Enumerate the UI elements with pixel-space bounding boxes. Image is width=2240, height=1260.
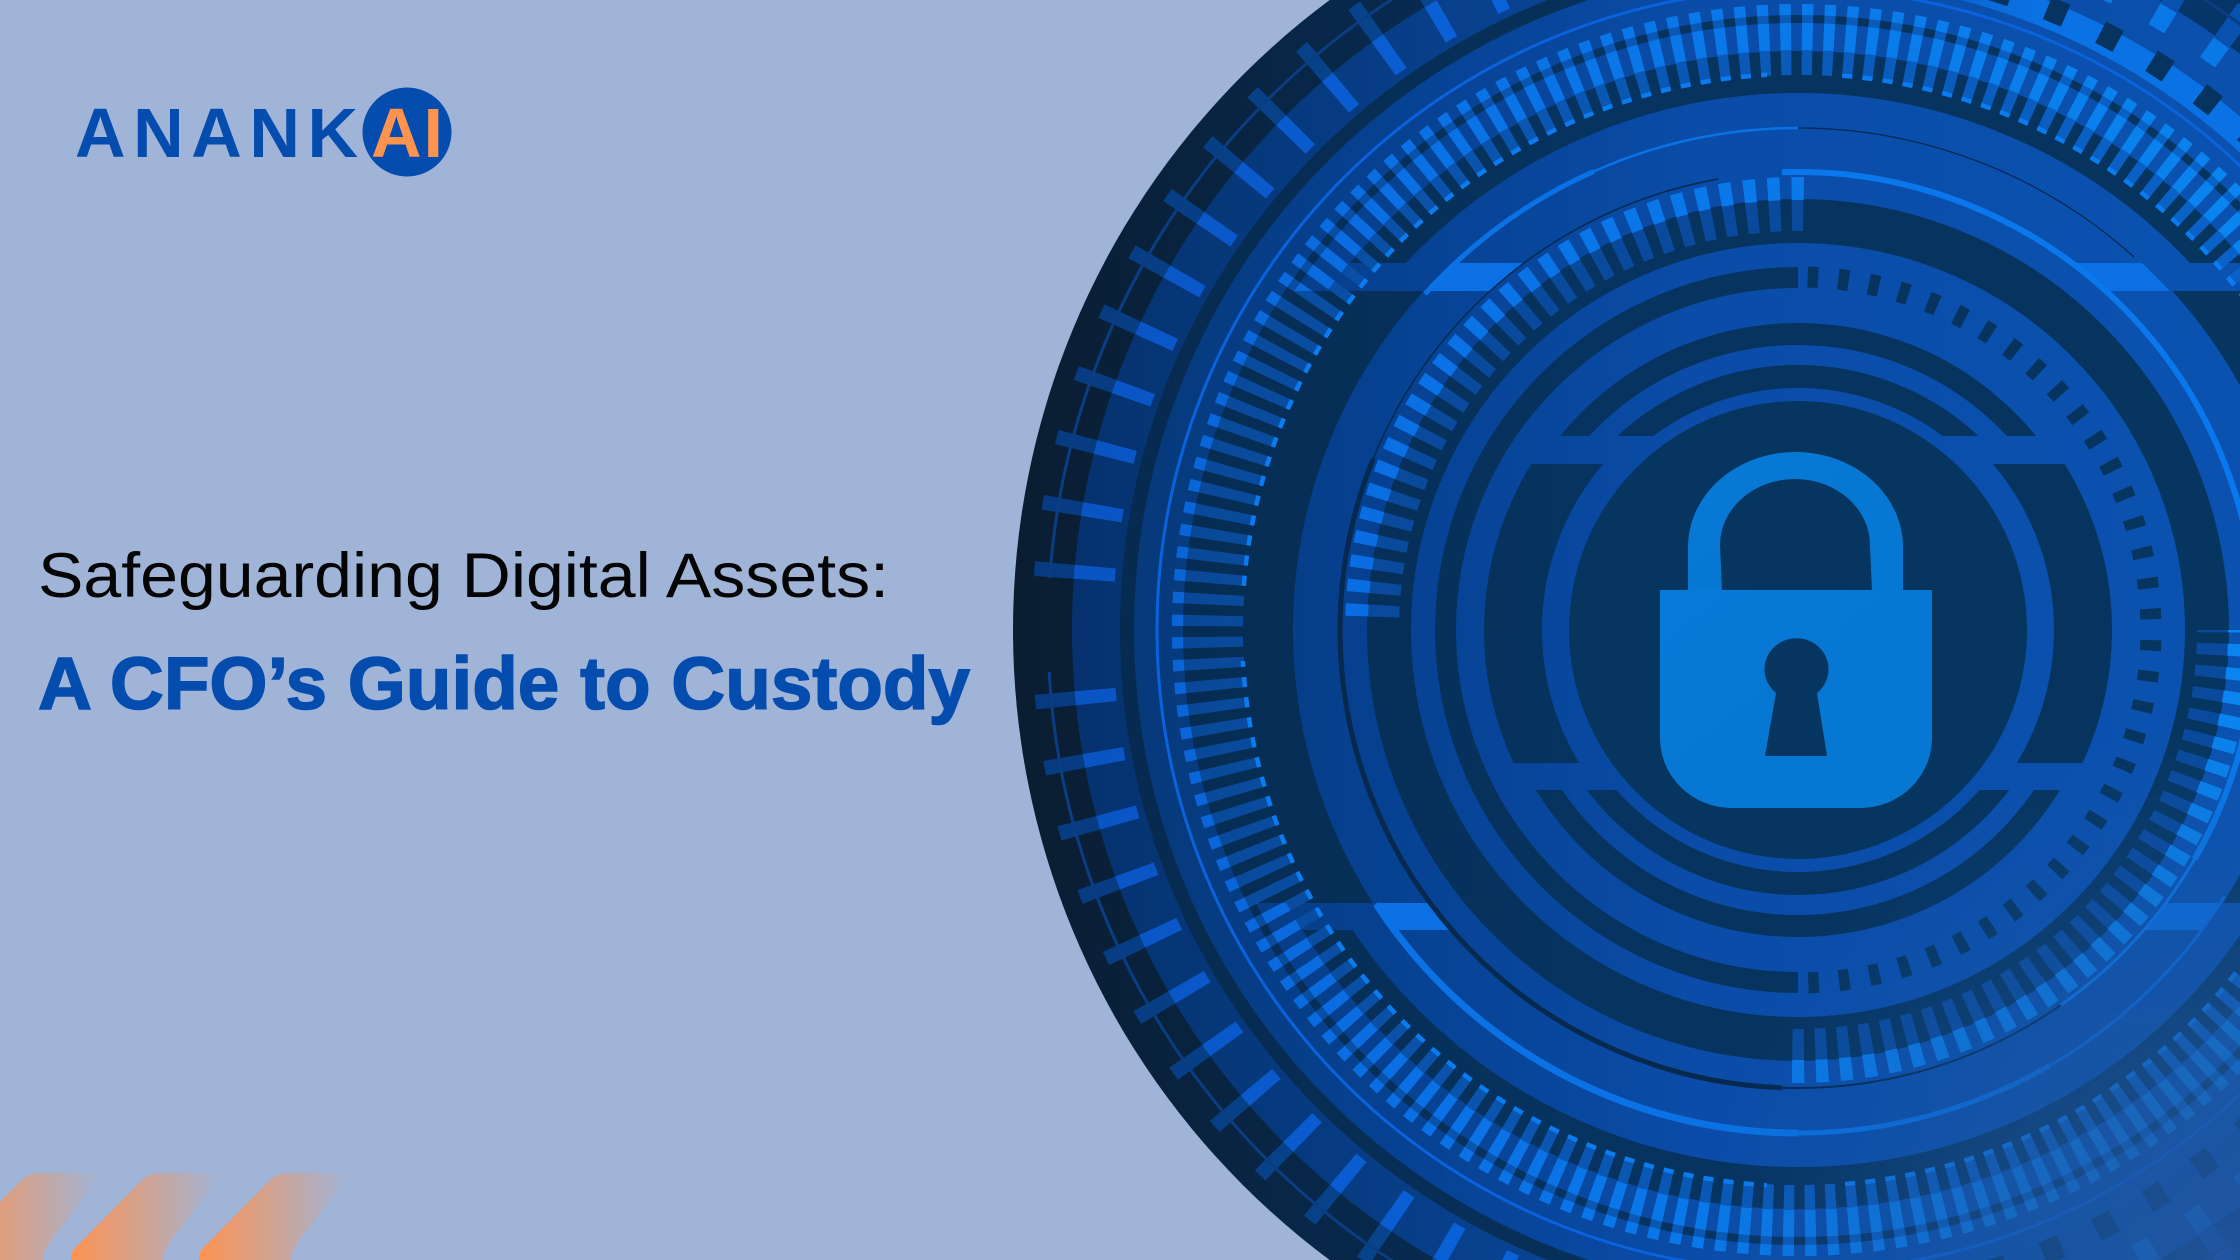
long radial bars, outer dim part [1034, 0, 1437, 1260]
bright top-right arc [1961, 0, 2240, 152]
outer dark disk [1013, 0, 2240, 1260]
line r458 lower right thin [2060, 858, 2196, 1006]
lighter corner glow [1013, 0, 2240, 1260]
lower right tick arc dim [1792, 630, 2228, 1060]
long radial bars, inner bright part [1074, 0, 1519, 1260]
upper left tick arc dim [1368, 200, 1804, 618]
line r458 upper left thin dark [1372, 178, 1718, 459]
tick ring bars [1208, 40, 2240, 1220]
security dial with concentric rings [1013, 0, 2240, 1260]
keyhole [1764, 638, 1828, 756]
chevron 2 [71, 1173, 222, 1260]
dark squares on bright arc [1988, 0, 2240, 1260]
tick ring inner bright dashes [1242, 74, 2240, 1186]
thin outer line [1048, 0, 2240, 1260]
solid left half ring [1435, 267, 1798, 993]
tick ring bright cap segments [1204, 36, 2240, 1224]
lower right tick arc bright [1792, 630, 2240, 1083]
line r503 lower left bright [1373, 902, 1798, 1136]
inner arcs outer [1502, 334, 2094, 926]
bright connector bands [1376, 263, 2218, 930]
side dark band [1183, 291, 2240, 903]
tick ring bright tips [1178, 10, 2240, 1250]
dark ring r671 [1120, 0, 1588, 1260]
upper left tick arc bright [1345, 177, 1804, 616]
padlock body [1660, 590, 1932, 808]
decorative chevrons [0, 1173, 350, 1260]
line r458 lower right bright [2192, 738, 2240, 860]
dark crossing ring [1187, 19, 2240, 1241]
logo wordmark: ANANK [75, 94, 358, 172]
dark ring r387-432 [1389, 221, 2207, 1039]
title block [38, 541, 970, 725]
title line 2: A CFO’s Guide to Custody [38, 642, 970, 725]
inner arcs inner [1544, 376, 2052, 884]
central dark disk [1569, 401, 2027, 859]
line r458 upper right bright [1782, 169, 2240, 522]
title line 1: Safeguarding Digital Assets: [38, 541, 889, 611]
right long bars, bright part [2104, 0, 2240, 1260]
top and bottom dark band behind ticks [1240, 72, 2240, 1188]
dashed right half ring [1807, 266, 2162, 994]
right long bars, dim part [2160, 0, 2240, 1260]
padlock shackle [1688, 452, 1903, 592]
logo AI letters: AI [371, 94, 443, 172]
chevron 3 [199, 1173, 350, 1260]
line r503 upper right dark [1798, 127, 2134, 258]
line r503 lower right thin [2049, 896, 2226, 1066]
bright thin line r641 [1157, 0, 2240, 1260]
brand logo [75, 88, 452, 176]
inner side dark blocks [1513, 345, 2083, 915]
logo circle [362, 88, 452, 176]
line r503 upper left bright [1423, 169, 1595, 296]
outer medium ring [1072, 0, 2240, 1260]
padlock icon [1660, 452, 1932, 808]
inner blue disk [1166, 0, 1647, 1260]
line r458 left dark [1338, 458, 1782, 1090]
line r503 upper left thin [1594, 126, 1798, 172]
line r458 bottom dark thin [1782, 1004, 2062, 1089]
line r503 lower right [1798, 1064, 2050, 1136]
chevron 1 [0, 1173, 102, 1260]
